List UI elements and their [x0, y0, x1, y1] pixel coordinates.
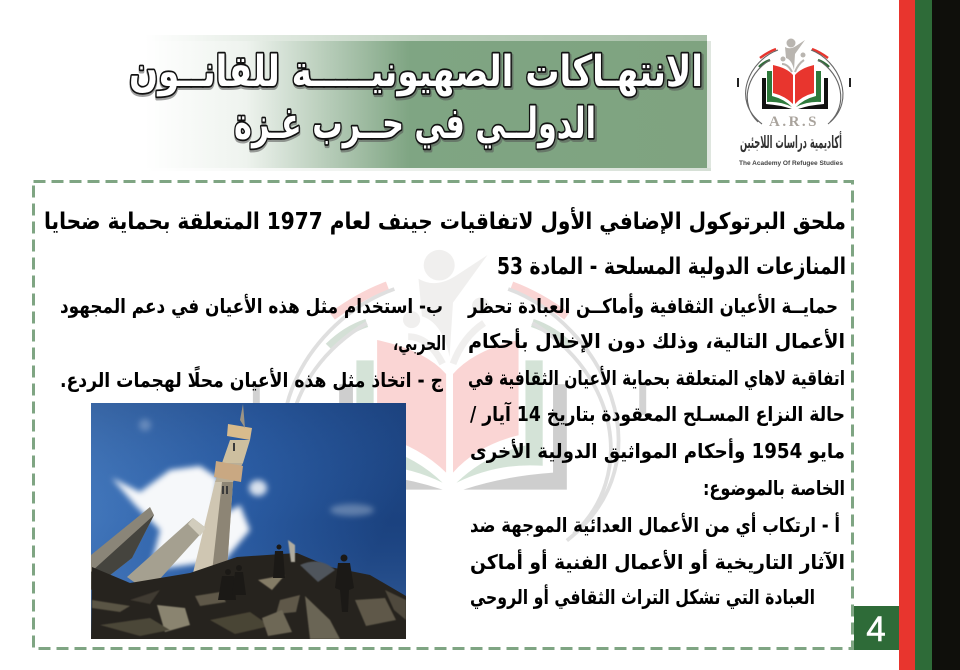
watermark logo [256, 250, 643, 541]
right column text: العبادة التي تشكل التراث الثقافي أو الروحي [470, 583, 815, 610]
title text: الانتهـاكات الصهيونيـــــة للقانــون [129, 49, 705, 99]
right column text: مايو 1954 وأحكام المواثيق الدولية الأخرى [470, 437, 845, 463]
right column text: الأعمال التالية، وذلك دون الإخلال بأحكام [468, 327, 845, 353]
right column text: الآثار التاريخية أو الأعمال الفنية أو أماكن [470, 548, 845, 574]
logo initials: A.R.S [769, 114, 819, 130]
left column text: ب- استخدام مثل هذه الأعيان في دعم المجهود [60, 293, 443, 319]
title text: الدولــي في حــرب غـزة [234, 99, 596, 149]
photo: damaged mosque minaret [91, 403, 406, 639]
title text: الانتهـاكات الصهيونيـــــة للقانــون [129, 47, 703, 97]
content frame [34, 182, 852, 648]
side stripes [899, 0, 960, 670]
left column text: الحربي، [393, 331, 446, 356]
right column text: حمايــة الأعيان الثقافية وأماكــن العبادة تحظر [467, 292, 838, 318]
right column text: حالة النزاع المسـلح المعقودة بتاريخ 14 آيار / [470, 401, 845, 426]
heading: المنازعات الدولية المسلحة - المادة 53 [497, 254, 846, 280]
title text: الدولــي في حــرب غـزة [234, 101, 598, 151]
title text [129, 47, 705, 151]
heading: ملحق البرتوكول الإضافي الأول لاتفاقيات جينف لعام 1977 المتعلقة بحماية ضحايا [44, 206, 846, 235]
right column text: الخاصة بالموضوع: [703, 476, 845, 500]
right column text: اتفاقية لاهاي المتعلقة بحماية الأعيان الثقافية في [468, 365, 845, 391]
title banner [129, 35, 711, 171]
logo [738, 38, 850, 167]
page number [854, 606, 899, 650]
left column text [60, 293, 446, 392]
right column text: أ - ارتكاب أي من الأعمال العدائية الموجهة ضد [470, 511, 840, 538]
heading [44, 206, 846, 280]
page number: 4 [866, 610, 886, 649]
left column text: ج - اتخاذ مثل هذه الأعيان محلًا لهجمات الردع. [60, 366, 443, 392]
logo english name: The Academy Of Refugee Studies [739, 161, 844, 167]
right column text [467, 292, 845, 610]
logo: أكاديمية دراسات اللاجئين [740, 131, 842, 153]
